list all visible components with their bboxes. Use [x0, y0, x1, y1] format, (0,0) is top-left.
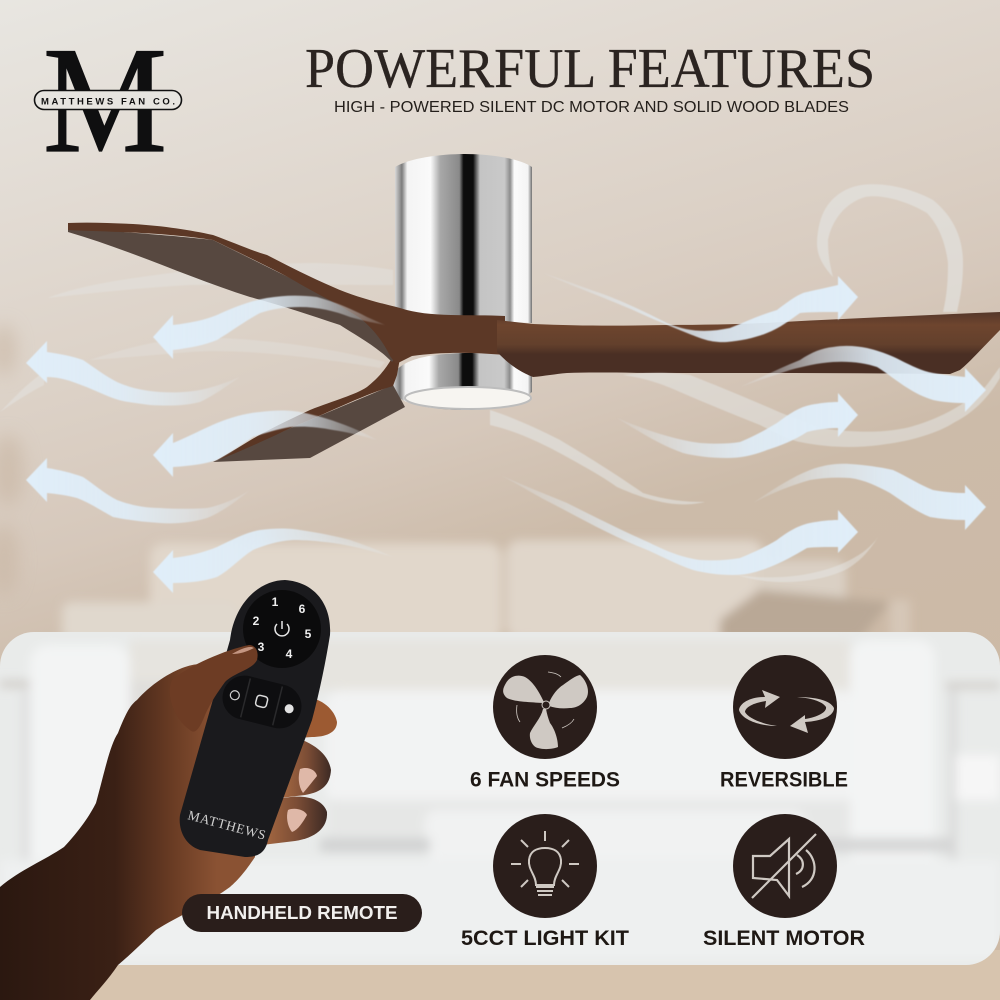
arrow 7 — [26, 341, 240, 406]
subtitle: HIGH - POWERED SILENT DC MOTOR AND SOLID WOOD BLADES — [334, 99, 849, 116]
arrow 5 — [753, 464, 986, 530]
remote numbers: 1 — [272, 595, 279, 609]
airflow arrows — [0, 184, 1000, 593]
background: blurred sofa — [62, 540, 910, 643]
icon: rotation arrows — [733, 655, 837, 759]
ceiling fan — [68, 154, 1000, 462]
logo: Matthews Fan Co: MATTHEWS FAN CO. — [41, 96, 175, 108]
arrow 10 — [153, 528, 393, 593]
label: 5CCT light kit: 5CCT LIGHT KIT — [461, 927, 629, 950]
airflow swirl top right — [817, 184, 963, 312]
handheld remote pill — [182, 894, 422, 932]
hand: thumb — [170, 645, 258, 732]
light lens — [405, 387, 531, 409]
finger: index — [298, 697, 337, 738]
remote numbers: 4 — [286, 647, 293, 661]
remote numbers: 5 — [305, 627, 312, 641]
remote body — [180, 580, 330, 857]
finger: ring — [262, 797, 327, 845]
arrow 2 — [617, 393, 858, 458]
remote numbers: 2 — [253, 614, 260, 628]
icon: muted speaker — [733, 814, 837, 918]
label: 6 fan speeds: 6 FAN SPEEDS — [470, 768, 620, 792]
hand: fingers — [262, 697, 337, 845]
arrow 1 — [543, 273, 858, 342]
icon: fan — [493, 655, 597, 759]
remote dial — [243, 590, 321, 668]
airflow streak under arrow three — [737, 537, 878, 582]
bottom floor strip — [0, 950, 1000, 1000]
hand holding remote — [0, 580, 337, 1000]
arrow 3 — [500, 475, 858, 575]
label: silent motor: SILENT MOTOR — [703, 927, 865, 950]
fingernail: ring — [287, 809, 307, 832]
airflow streak mid left — [90, 338, 385, 368]
fingernail: middle — [299, 768, 317, 793]
handheld remote pill: HANDHELD REMOTE — [206, 903, 398, 923]
arrow 6 — [153, 296, 385, 359]
airflow swirl lower right — [623, 367, 1000, 447]
fan motor housing — [395, 154, 532, 323]
label: reversible: REVERSIBLE — [720, 768, 848, 792]
background: blurred plant on left edge — [0, 324, 24, 596]
feature: 6 fan speeds — [470, 655, 620, 792]
logo: Matthews Fan Co: M — [43, 16, 167, 184]
feature: silent motor — [703, 814, 865, 950]
panel: translucent features panel — [0, 632, 1000, 965]
upper-left blade — [68, 223, 505, 364]
remote numbers: 6 — [299, 602, 306, 616]
airflow streak centre — [490, 410, 705, 504]
airflow streak upper left — [48, 263, 393, 298]
feature: reversible — [720, 655, 848, 792]
remote power icon — [275, 621, 289, 636]
thumbnail — [232, 647, 254, 654]
title: POWERFUL FEATURES — [305, 38, 875, 100]
airflow streaks behind fan — [48, 263, 393, 368]
remote numbers: 3 — [258, 640, 265, 654]
arrow 9 — [26, 458, 250, 523]
airflow streak left tail — [0, 372, 44, 412]
hand: palm and arm — [0, 664, 255, 1000]
arrow 4 — [740, 346, 986, 412]
finger: middle — [280, 735, 331, 798]
right blade — [497, 312, 1000, 377]
remote numbers — [253, 595, 312, 661]
remote button cluster — [218, 671, 306, 733]
lower-left blade — [213, 358, 405, 462]
icon: light bulb — [493, 814, 597, 918]
arrow 8 — [153, 410, 377, 477]
remote brand: MATTHEWS — [186, 807, 267, 843]
light kit ring — [393, 353, 532, 410]
feature: 5CCT light kit — [461, 814, 629, 950]
